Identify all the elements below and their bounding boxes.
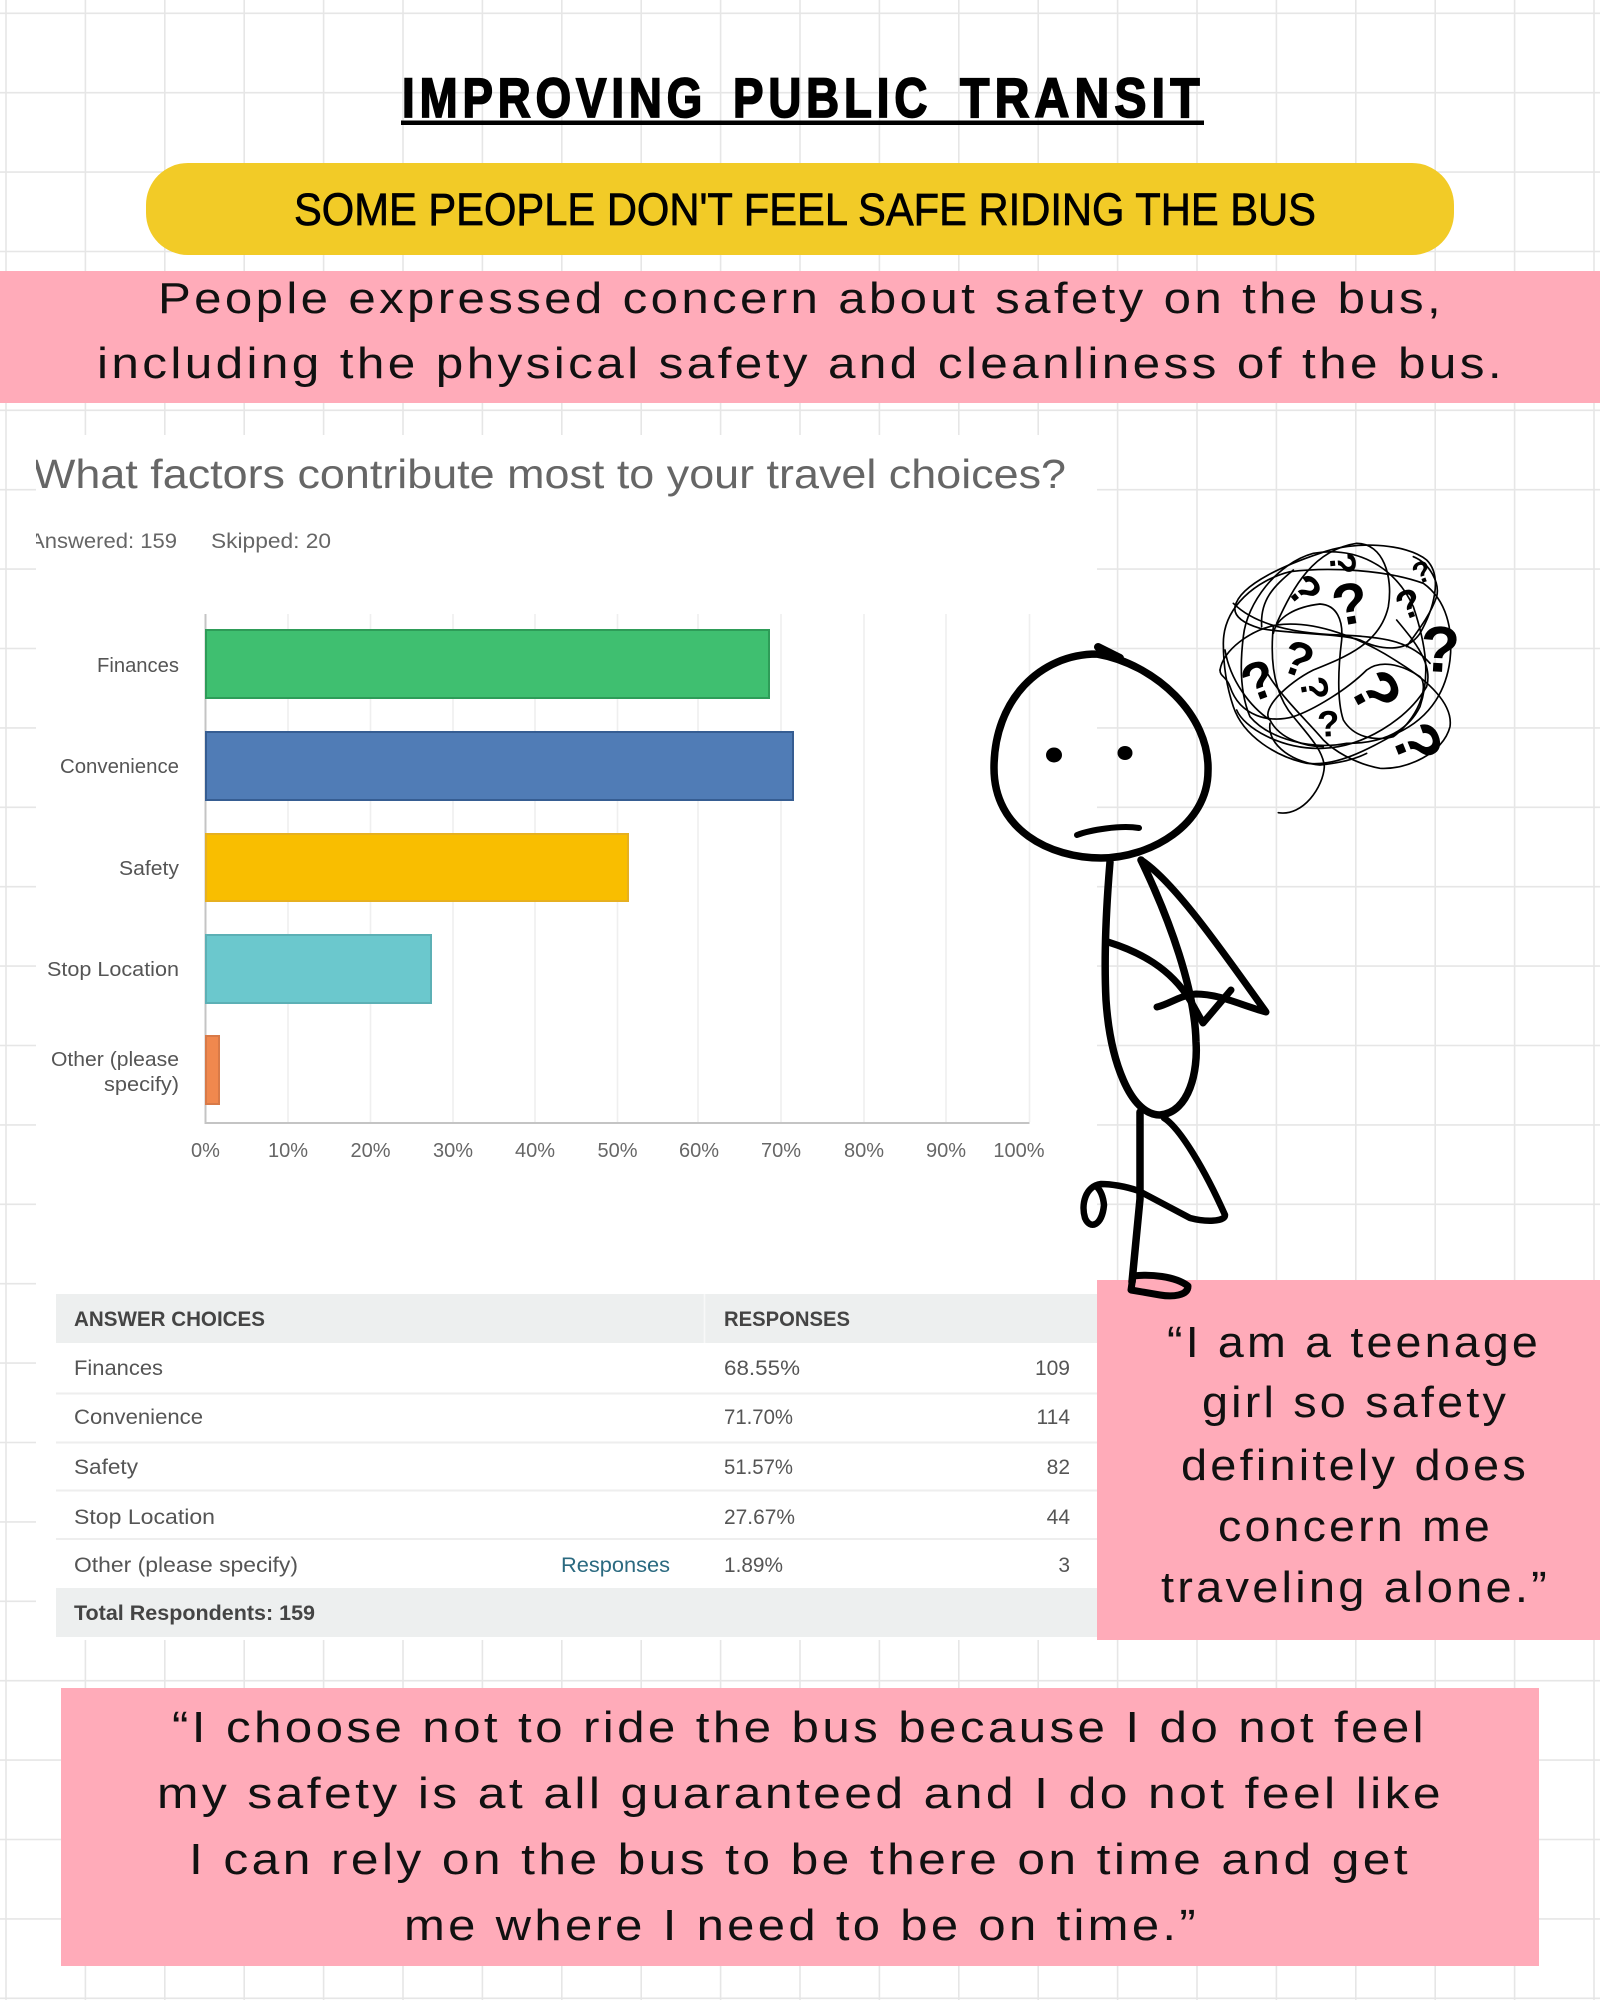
- panel: bus safety quote: “I choose not to ride the bus because I do not feel: [172, 1703, 1427, 1752]
- panel: teenage girl quote: [1097, 1280, 1600, 1640]
- question marks: ?: [1335, 659, 1415, 726]
- title: PUBLIC: [733, 67, 932, 129]
- results table: 44: [1047, 1506, 1070, 1529]
- question marks: ?: [1390, 580, 1428, 629]
- question marks: ?: [1316, 703, 1341, 745]
- axis labels: 70%: [761, 1140, 801, 1162]
- results table: 3: [1058, 1554, 1070, 1577]
- title: [401, 67, 1205, 130]
- results table: 27.67%: [724, 1506, 795, 1529]
- results table: 82: [1047, 1456, 1070, 1479]
- bar: safety: [206, 834, 628, 901]
- far arm: [1141, 860, 1266, 1012]
- panel: bus safety quote: me where I need to be on time.”: [404, 1901, 1199, 1950]
- survey question: [30, 451, 1066, 553]
- survey question: What factors contribute most to your travel choices?: [33, 451, 1066, 497]
- question marks: ?: [1291, 673, 1337, 704]
- results table: Responses: [561, 1554, 670, 1577]
- axis labels: 0%: [191, 1140, 220, 1162]
- eyes: [1046, 746, 1132, 762]
- category labels: Stop Location: [47, 959, 179, 981]
- near arm: [1108, 942, 1231, 1023]
- results table: Other (please specify): [74, 1554, 298, 1577]
- category labels: specify): [104, 1074, 179, 1096]
- panel: summary statement: including the physical safety and cleanliness of the bus.: [97, 339, 1505, 388]
- results table: ANSWER CHOICES: [74, 1308, 265, 1331]
- question marks: ?: [1327, 569, 1373, 640]
- panel: bus safety quote: I can rely on the bus to be there on time and get: [189, 1835, 1411, 1884]
- panel: bus safety quote: my safety is at all guaranteed and I do not feel like: [157, 1769, 1444, 1818]
- axis labels: 30%: [433, 1140, 473, 1162]
- axis labels: 60%: [679, 1140, 719, 1162]
- panel: teenage girl quote: concern me: [1218, 1502, 1493, 1551]
- foot: [1131, 1275, 1188, 1296]
- title: TRANSIT: [960, 68, 1205, 130]
- question marks: ?: [1277, 565, 1331, 616]
- results table: 51.57%: [724, 1456, 793, 1479]
- results table: Safety: [74, 1456, 139, 1479]
- results table: 71.70%: [724, 1406, 793, 1429]
- survey question: Skipped: 20: [211, 530, 331, 553]
- body: [1105, 860, 1196, 1115]
- icon: worried stick figure: [994, 543, 1462, 1296]
- bar chart: [47, 614, 1045, 1162]
- frown: [1077, 827, 1139, 835]
- category labels: [47, 655, 179, 1096]
- category labels: Other (please: [51, 1049, 179, 1071]
- head: [994, 654, 1208, 858]
- axis labels: 90%: [926, 1140, 966, 1162]
- bar: convenience: [206, 732, 793, 800]
- results table: 68.55%: [724, 1357, 800, 1380]
- bar: other: [206, 1036, 219, 1104]
- category labels: Safety: [119, 858, 179, 880]
- axis labels: 40%: [515, 1140, 555, 1162]
- panel: summary statement: People expressed concern about safety on the bus,: [158, 274, 1444, 323]
- results table: 114: [1037, 1406, 1070, 1429]
- results table: RESPONSES: [724, 1308, 850, 1331]
- results table: 109: [1035, 1357, 1070, 1380]
- subtitle banner: [146, 163, 1454, 255]
- axis labels: 20%: [350, 1140, 391, 1162]
- hair flick: [1098, 647, 1120, 658]
- axis labels: 100%: [993, 1140, 1045, 1162]
- axis labels: [191, 1140, 1045, 1162]
- results table: 1.89%: [724, 1554, 783, 1577]
- axis labels: 80%: [844, 1140, 884, 1162]
- question marks: ?: [1233, 648, 1284, 715]
- results table: Stop Location: [74, 1506, 215, 1529]
- question marks: ?: [1321, 550, 1364, 576]
- panel: bus safety quote: [61, 1688, 1539, 1966]
- results table: Finances: [74, 1357, 163, 1380]
- title: IMPROVING: [402, 67, 707, 129]
- panel: survey screenshot: [30, 435, 1097, 1640]
- subtitle banner: SOME PEOPLE DON'T FEEL SAFE RIDING THE BUS: [294, 184, 1316, 235]
- panel: teenage girl quote: girl so safety: [1202, 1378, 1509, 1427]
- panel: teenage girl quote: definitely does: [1181, 1441, 1529, 1490]
- category labels: Convenience: [60, 756, 179, 778]
- standing leg: [1132, 1112, 1140, 1282]
- panel: teenage girl quote: traveling alone.”: [1161, 1563, 1550, 1612]
- axis labels: 50%: [597, 1140, 638, 1162]
- question marks: ?: [1275, 629, 1321, 690]
- question marks: ?: [1408, 554, 1436, 591]
- results table: Total Respondents: 159: [74, 1602, 315, 1625]
- question marks: ?: [1377, 713, 1456, 775]
- results table: [56, 1294, 1097, 1637]
- bar: stop location: [206, 935, 431, 1003]
- question marks: [1233, 550, 1462, 775]
- icon: tangled thought bubble: [1220, 543, 1462, 813]
- panel: teenage girl quote: “I am a teenage: [1167, 1318, 1541, 1367]
- survey question: Answered: 159: [30, 530, 177, 553]
- category labels: Finances: [97, 655, 179, 677]
- raised leg: [1084, 1118, 1225, 1225]
- panel: summary statement: [0, 271, 1600, 403]
- question marks: ?: [1418, 612, 1462, 687]
- results table: Convenience: [74, 1406, 203, 1429]
- axis labels: 10%: [268, 1140, 308, 1162]
- bar: finances: [206, 630, 769, 698]
